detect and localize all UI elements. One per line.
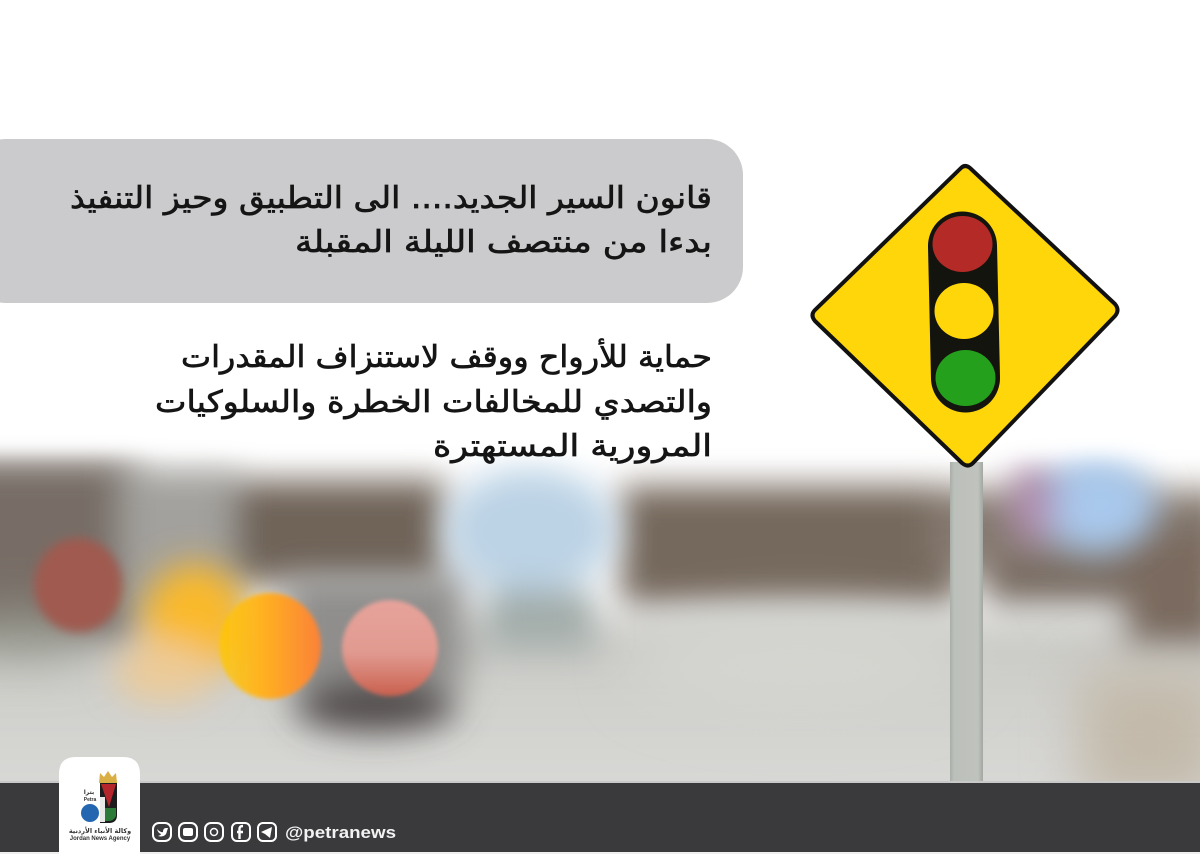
grey headline panel	[0, 139, 743, 303]
headline line 1: قانون السير الجديد.... الى التطبيق وحيز التنفيذ	[70, 181, 712, 216]
agency wordmark: Petra	[84, 797, 96, 803]
footer bar	[0, 781, 1200, 854]
body paragraph	[155, 337, 712, 464]
social media icons	[153, 823, 276, 841]
blurred street photo background	[0, 444, 1200, 781]
icon: twitter	[153, 823, 171, 841]
icon: telegram	[258, 823, 276, 841]
crown	[99, 771, 117, 783]
icon: instagram	[205, 823, 223, 841]
white fade at top of photo	[0, 380, 1200, 450]
red light	[932, 216, 992, 272]
diamond plate	[812, 166, 1118, 466]
paragraph line 1: حماية للأرواح ووقف لاستنزاف المقدرات	[181, 337, 712, 375]
road sign: traffic light warning	[812, 166, 1118, 466]
green light	[936, 350, 996, 406]
social handle: @petranews	[285, 823, 396, 842]
signal housing	[928, 211, 1000, 413]
headline line 2: بدءا من منتصف الليلة المقبلة	[295, 225, 712, 260]
flag	[100, 783, 117, 823]
icon: youtube	[179, 823, 197, 841]
yellow light	[934, 283, 994, 339]
agency wordmark: Jordan News Agency	[70, 836, 131, 842]
Petra logo card	[59, 757, 140, 854]
globe	[81, 804, 99, 822]
agency wordmark: بترا	[84, 789, 94, 796]
icon: facebook	[232, 823, 250, 841]
paragraph line 3: المرورية المستهترة	[433, 429, 712, 464]
paragraph line 2: والتصدي للمخالفات الخطرة والسلوكيات	[155, 385, 712, 420]
headline text	[70, 181, 712, 260]
agency wordmark: وكالة الأنباء الأردنية	[69, 826, 131, 835]
agency wordmark	[69, 789, 131, 842]
signpost pole	[950, 462, 983, 783]
